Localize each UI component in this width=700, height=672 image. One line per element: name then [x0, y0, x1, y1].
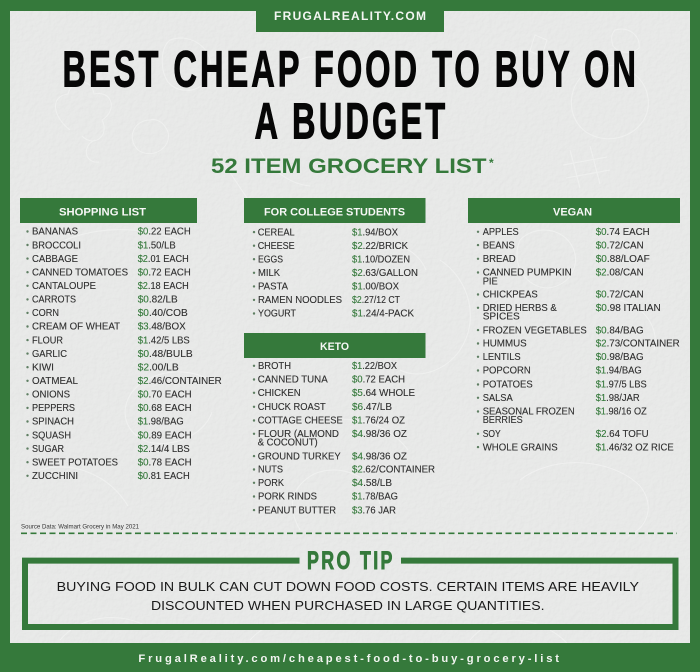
keto rows: CANNED TUNA: [258, 375, 328, 386]
pro tip body text: [57, 580, 640, 613]
shopping list rows: BANANAS: [32, 227, 78, 238]
keto rows: CHICKEN: [258, 388, 301, 399]
panel: shopping list: [20, 198, 222, 482]
college students rows: EGGS: [258, 254, 283, 265]
college students rows: RAMEN NOODLES: [258, 295, 342, 306]
shopping list rows: $0.40/COB: [138, 308, 188, 319]
title: A BUDGET: [254, 93, 445, 151]
vegan rows: PIE: [483, 276, 498, 287]
shopping list rows: $1.98/BAG: [138, 417, 184, 428]
keto rows: $2.62/CONTAINER: [352, 465, 435, 476]
vegan rows: $0.84/BAG: [596, 325, 644, 336]
shopping list rows: $0.82/LB: [138, 295, 178, 306]
keto rows: PORK: [258, 478, 284, 489]
header tab: site name: FRUGALREALITY.COM: [274, 9, 426, 23]
vegan rows: $1.97/5 LBS: [596, 380, 647, 391]
college students rows: [253, 227, 418, 320]
vegan rows: WHOLE GRAINS: [483, 442, 558, 453]
shopping list rows: $0.81 EACH: [138, 471, 190, 482]
college students rows: YOGURT: [258, 309, 296, 320]
vegan rows: $0.88/LOAF: [596, 254, 650, 265]
shopping list rows: $2.14/4 LBS: [138, 444, 190, 455]
shopping list rows: $0.89 EACH: [138, 430, 192, 441]
keto rows: CHUCK ROAST: [258, 402, 326, 413]
shopping list rows: CARROTS: [32, 295, 76, 306]
keto rows: $1.22/BOX: [352, 361, 397, 372]
keto rows: $6.47/LB: [352, 402, 392, 413]
college students rows: $1.24/4-PACK: [352, 309, 414, 320]
shopping list rows: $0.68 EACH: [138, 403, 192, 414]
vegan rows: DRIED HERBS &: [483, 303, 557, 314]
college students rows: CEREAL: [258, 227, 295, 238]
vegan rows: $2.08/CAN: [596, 268, 644, 279]
keto rows: FLOUR (ALMOND: [258, 429, 339, 440]
shopping list rows: $2.00/LB: [138, 362, 179, 373]
title: [62, 41, 636, 151]
keto rows: $3.76 JAR: [352, 505, 396, 516]
keto rows: $5.64 WHOLE: [352, 388, 415, 399]
shopping list rows: SQUASH: [32, 430, 71, 441]
vegan rows: $0.72/CAN: [596, 240, 644, 251]
vegan rows: APPLES: [483, 227, 519, 238]
vegan rows: $1.98/JAR: [596, 393, 640, 404]
vegan rows: SALSA: [483, 393, 513, 404]
shopping list rows: GARLIC: [32, 349, 67, 360]
shopping list rows: CORN: [32, 308, 59, 319]
shopping list rows: CREAM OF WHEAT: [32, 322, 120, 333]
keto rows: $4.98/36 OZ: [352, 429, 407, 440]
shopping list rows: $3.48/BOX: [138, 322, 186, 333]
keto rows: COTTAGE CHEESE: [258, 416, 343, 427]
vegan rows: $2.73/CONTAINER: [596, 339, 680, 350]
shopping list rows: SPINACH: [32, 417, 74, 428]
keto rows: PEANUT BUTTER: [258, 505, 336, 516]
shopping list rows: SWEET POTATOES: [32, 457, 118, 468]
shopping list rows: KIWI: [32, 362, 54, 373]
panel: pro tip: [25, 546, 676, 627]
shopping list rows: $0.72 EACH: [138, 267, 191, 278]
shopping list rows: ONIONS: [32, 390, 70, 400]
shopping list rows: ZUCCHINI: [32, 471, 78, 482]
shopping list rows: BROCCOLI: [32, 240, 81, 251]
vegan rows: CHICKPEAS: [483, 290, 538, 301]
vegan rows: BREAD: [483, 254, 516, 265]
vegan rows: $0.74 EACH: [596, 227, 650, 238]
shopping list rows: $0.22 EACH: [138, 227, 191, 238]
shopping list rows: OATMEAL: [32, 376, 78, 387]
college students rows: $2.22/BRICK: [352, 241, 408, 252]
keto rows: $4.58/LB: [352, 478, 392, 489]
college students rows: CHEESE: [258, 241, 295, 252]
college students rows: $2.63/GALLON: [352, 268, 418, 279]
vegan heading: VEGAN: [553, 206, 592, 218]
vegan rows: $0.72/CAN: [596, 290, 644, 301]
subtitle: *: [489, 156, 494, 170]
keto heading: KETO: [320, 341, 349, 353]
college students heading: [244, 198, 426, 223]
footer url: FrugalReality.com/cheapest-food-to-buy-grocery-list: [138, 653, 559, 665]
vegan rows: POPCORN: [483, 366, 531, 377]
keto rows: BROTH: [258, 361, 291, 372]
shopping list rows: CANTALOUPE: [32, 281, 96, 292]
keto rows: $1.78/BAG: [352, 492, 398, 503]
vegan rows: $0.98/BAG: [596, 352, 644, 363]
header tab: site name: [256, 9, 444, 32]
vegan rows: POTATOES: [483, 380, 533, 391]
keto rows: NUTS: [258, 465, 283, 476]
shopping list heading: [20, 198, 197, 223]
shopping list rows: SUGAR: [32, 444, 64, 455]
shopping list rows: CANNED TOMATOES: [32, 267, 128, 278]
college students rows: $1.94/BOX: [352, 227, 398, 238]
vegan rows: CANNED PUMPKIN: [483, 268, 572, 279]
vegan rows: LENTILS: [483, 352, 521, 363]
college students rows: $1.10/DOZEN: [352, 254, 410, 265]
vegan rows: SEASONAL FROZEN: [483, 407, 575, 418]
college students rows: PASTA: [258, 282, 288, 293]
pro tip body text: DISCOUNTED WHEN PURCHASED IN LARGE QUANTITIES.: [151, 599, 545, 613]
panel: for college students: [244, 198, 426, 320]
vegan rows: SOY: [483, 429, 501, 440]
shopping list heading: SHOPPING LIST: [59, 206, 146, 218]
vegan rows: $2.64 TOFU: [596, 429, 649, 440]
pro tip body text: BUYING FOOD IN BULK CAN CUT DOWN FOOD COSTS. CERTAIN ITEMS ARE HEAVILY: [57, 580, 640, 594]
shopping list rows: FLOUR: [32, 335, 63, 346]
vegan rows: BEANS: [483, 240, 515, 251]
source note: Source Data: Walmart Grocery in May 2021: [21, 525, 140, 531]
shopping list rows: CABBAGE: [32, 254, 78, 265]
shopping list rows: $2.46/CONTAINER: [138, 376, 222, 387]
shopping list rows: $0.70 EACH: [138, 390, 192, 400]
vegan rows: HUMMUS: [483, 339, 527, 350]
panel: keto: [244, 333, 435, 516]
shopping list rows: $0.78 EACH: [138, 457, 192, 468]
keto heading: [244, 333, 426, 358]
keto rows: $1.76/24 OZ: [352, 416, 405, 427]
shopping list rows: $2.18 EACH: [138, 281, 189, 292]
vegan rows: $0.98 ITALIAN: [596, 303, 661, 314]
keto rows: PORK RINDS: [258, 492, 317, 503]
subtitle: 52 ITEM GROCERY LIST: [211, 154, 486, 178]
shopping list rows: PEPPERS: [32, 403, 75, 414]
vegan heading: [468, 198, 680, 223]
pro tip frame: [25, 561, 676, 627]
shopping list rows: $1.50/LB: [138, 240, 176, 251]
keto rows: $0.72 EACH: [352, 375, 405, 386]
keto rows: $4.98/36 OZ: [352, 451, 407, 462]
college students heading: FOR COLLEGE STUDENTS: [264, 206, 405, 218]
panel: vegan: [468, 198, 680, 453]
college students rows: MILK: [258, 268, 280, 279]
vegan rows: FROZEN VEGETABLES: [483, 325, 587, 336]
shopping list rows: $1.42/5 LBS: [138, 335, 190, 346]
college students rows: $1.00/BOX: [352, 282, 399, 293]
shopping list rows: [26, 227, 222, 482]
shopping list rows: $0.48/BULB: [138, 349, 193, 360]
keto rows: GROUND TURKEY: [258, 451, 341, 462]
vegan rows: $1.46/32 OZ RICE: [596, 442, 674, 453]
vegan rows: SPICES: [483, 312, 520, 323]
keto rows: & COCONUT): [258, 437, 318, 448]
vegan rows: BERRIES: [483, 415, 523, 426]
keto rows: [253, 361, 435, 516]
pro tip heading: PRO TIP: [307, 546, 392, 575]
vegan rows: $1.98/16 OZ: [596, 407, 647, 418]
college students rows: $2.27/12 CT: [352, 295, 400, 306]
shopping list rows: $2.01 EACH: [138, 254, 189, 265]
vegan rows: $1.94/BAG: [596, 366, 642, 377]
vegan rows: [477, 227, 680, 453]
title: BEST CHEAP FOOD TO BUY ON: [62, 41, 636, 99]
